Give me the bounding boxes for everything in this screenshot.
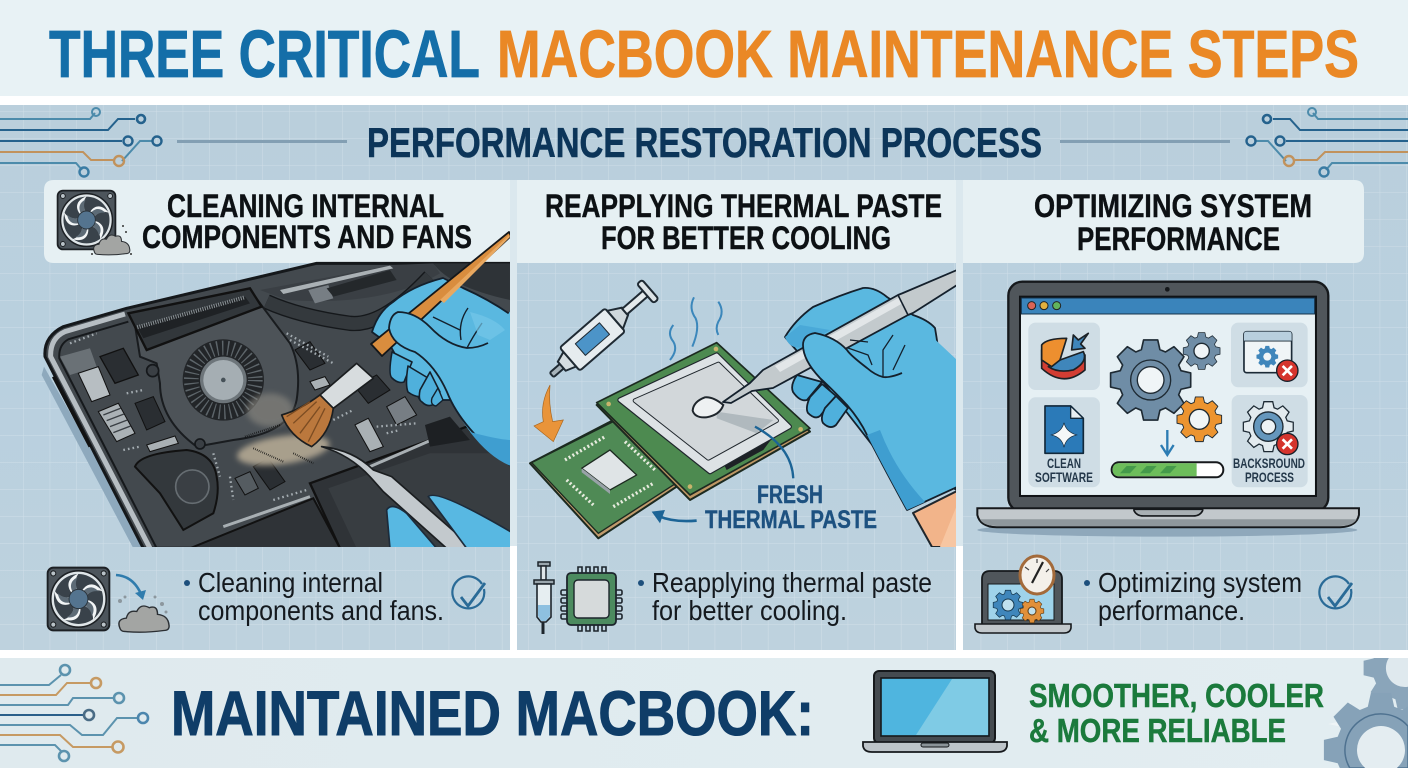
icon: app window with error (1244, 332, 1298, 381)
icon: clean document (1045, 406, 1083, 453)
panel 3 caption (975, 556, 1352, 633)
panel 3 header: PERFORMANCE (1077, 221, 1280, 257)
icon: check mark (1319, 576, 1352, 608)
panel: reapplying thermal paste (517, 180, 957, 634)
icon: laptop (863, 671, 1007, 752)
illustration: cpu with thermal paste and syringe (530, 270, 957, 547)
panel 1 header: COMPONENTS AND FANS (142, 219, 472, 255)
illustration: laptop showing optimization screen (977, 282, 1359, 537)
section heading: PERFORMANCE RESTORATION PROCESS (367, 119, 1042, 166)
column separators (510, 180, 963, 650)
main conclusion text: MAINTAINED MACBOOK: (171, 679, 814, 749)
label: fresh thermal paste: THERMAL PASTE (705, 506, 877, 534)
section strip: performance restoration process (0, 108, 1408, 176)
tiles (1028, 323, 1308, 487)
circuit lines right (1246, 108, 1408, 176)
panel 2 caption: Reapplying thermal paste (652, 567, 932, 598)
panel 1 caption (48, 567, 485, 632)
glove holding paste applicator (723, 270, 957, 547)
panel 1 header: CLEANING INTERNAL (167, 188, 444, 224)
icon: laptop with gauge and gears (975, 556, 1071, 633)
circuit lines left (0, 108, 162, 176)
tile labels (1035, 455, 1305, 485)
title: THREE CRITICAL (49, 17, 480, 92)
glove holding brush (371, 232, 511, 466)
circuit lines bottom (0, 665, 148, 761)
icon: fan with dust (58, 191, 132, 255)
lower board (530, 417, 677, 538)
icon: check mark (452, 576, 485, 608)
panel 3 caption: Optimizing system (1098, 567, 1302, 598)
icon: corner gears (1324, 658, 1408, 768)
label: fresh thermal paste (705, 481, 877, 534)
bottom band: maintained macbook (0, 658, 1408, 768)
arrow down (1161, 430, 1174, 455)
panel 3 caption: performance. (1098, 595, 1245, 626)
panel 1 caption: components and fans. (198, 595, 444, 626)
illustration: open macbook with fan, brush and tweezers (42, 232, 513, 548)
icon: gears (1111, 333, 1222, 442)
icon: background process gear (1243, 402, 1298, 455)
orange arrow (534, 385, 563, 442)
panel 2 caption: for better cooling. (652, 595, 847, 626)
tile labels: CLEAN (1047, 455, 1081, 471)
panel 3 header: OPTIMIZING SYSTEM (1034, 188, 1312, 224)
panel 1 header (44, 180, 510, 263)
result text: & MORE RELIABLE (1029, 712, 1286, 749)
icon: syringe and chip (534, 562, 622, 634)
panel 2 caption (534, 562, 932, 634)
panel 1 caption: Cleaning internal (198, 567, 383, 598)
result text (1029, 677, 1324, 749)
label: fresh thermal paste: FRESH (757, 481, 823, 509)
panel: cleaning internal components and fans (42, 180, 513, 632)
result text: SMOOTHER, COOLER (1029, 677, 1324, 714)
thermal paste blob (693, 397, 723, 417)
tile labels: PROCESS (1245, 469, 1294, 485)
panel 2 header (517, 180, 956, 263)
panel: optimizing system performance (963, 180, 1364, 633)
icon: disk chart (1042, 333, 1088, 379)
icon: fan and dust pile (48, 568, 169, 632)
panel 2 header: REAPPLYING THERMAL PASTE (545, 188, 942, 224)
panel 3 header (963, 180, 1364, 263)
progress bar (1112, 462, 1223, 477)
upper board (596, 404, 811, 501)
title (49, 17, 1359, 92)
panel 2 header: FOR BETTER COOLING (601, 220, 891, 256)
callout arrows (755, 427, 793, 478)
steam (670, 297, 722, 360)
tile labels: BACKSROUND (1233, 455, 1305, 471)
tile labels: SOFTWARE (1035, 469, 1093, 485)
heat spreader (620, 355, 789, 472)
syringe (549, 280, 658, 378)
base (977, 508, 1359, 527)
